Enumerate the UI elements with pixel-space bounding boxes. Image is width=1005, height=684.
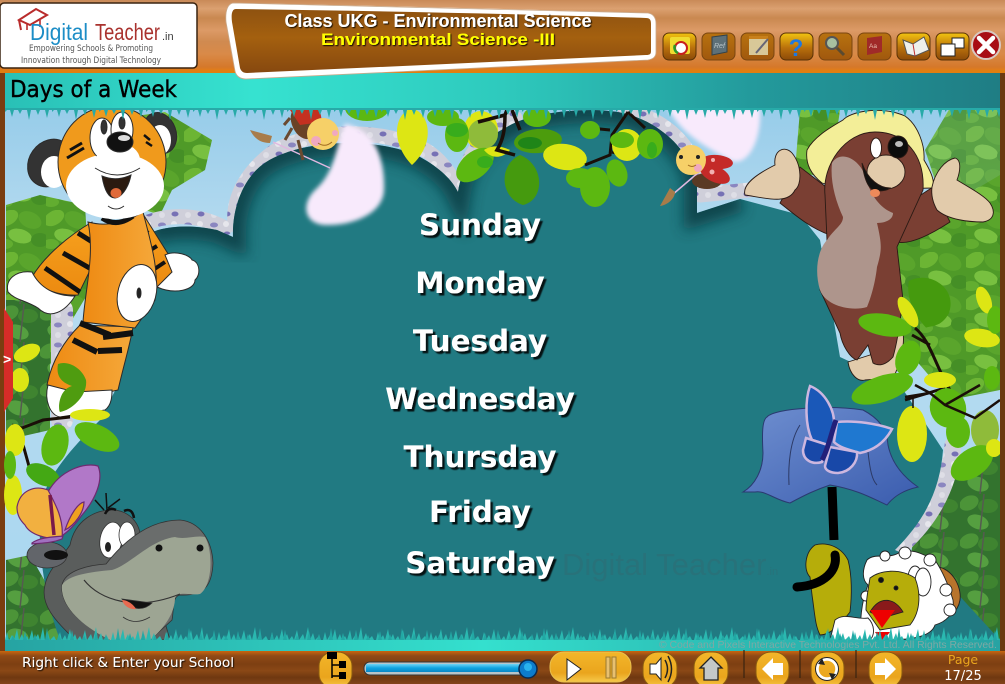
logo word: .in: .in [162,31,174,43]
icon: help: ? [789,35,803,62]
logo word: Digital: Digital [30,19,88,45]
plaque subheading: Environmental Science -III [321,30,555,49]
day: Wednesday: Wednesday [385,382,575,416]
icon: dictionary: Aa [869,43,877,50]
turtle character [797,544,960,642]
icon: refresh [811,652,844,684]
day: Tuesday: Tuesday [413,324,547,358]
progress bar [364,660,537,678]
title plaque [226,3,656,79]
icon: graduation cap [19,9,47,30]
teal centre panel [40,110,1000,640]
icon: dictionary [858,33,891,60]
hippo character [27,493,213,640]
logo tagline line 1: Empowering Schools & Promoting [29,44,153,54]
icon: magnifier [819,33,852,60]
foliage backdrop [6,108,1000,640]
left arm [780,167,830,235]
day: Friday: Friday [429,495,531,529]
bonnet [861,547,956,640]
page number: 17/25 [944,669,982,684]
mole character [745,110,993,380]
tiger character [7,106,199,417]
icon: folder clock [663,33,696,60]
left arm [32,222,100,295]
icon: tree menu [319,652,352,684]
icon: home [694,652,728,684]
page label: Page [948,652,978,667]
icon: notepad [741,33,774,60]
bottom band [5,626,1000,651]
list of days [385,208,575,580]
day: Saturday: Saturday [405,546,555,580]
play and pause control [550,652,631,682]
branch with leaves left [4,340,124,515]
watermark: Digital Teacher.in [562,547,778,582]
branch with leaves right [848,275,1003,488]
right arm [890,187,950,243]
icon: help [780,33,813,62]
right hand [932,158,993,222]
legs [47,325,133,400]
top title band [5,73,1000,122]
ladybug right [660,145,734,206]
top grass fringe [5,108,1000,122]
butterfly purple [17,465,100,544]
icon: reference book: Ref [714,43,726,50]
footer school label: Right click & Enter your School [22,655,234,671]
left and right frame: > [3,351,11,367]
icon: speaker [643,652,677,684]
top hanging leaves [345,95,663,207]
icon: reference book [702,33,735,60]
belly [817,157,893,309]
icon: open book [897,33,930,60]
glowing blobs [306,108,760,225]
face [66,153,164,219]
logo word: Teacher: Teacher [95,19,160,45]
icon: previous arrow [756,652,789,684]
logo panel [0,3,197,68]
plaque heading: Class UKG - Environmental Science [284,11,592,31]
divider [744,650,856,678]
page heading: Days of a Week [10,77,178,103]
icon: next arrow [869,652,902,684]
side tab [4,308,13,412]
right arm [142,214,178,288]
body [83,212,156,328]
brown body [820,132,923,365]
left hand [745,149,800,199]
copyright: © Code and Pixels Interactive Technologies Pvt. Ltd. All Rights Reserved. [659,640,997,651]
header wood background [0,0,1005,72]
day: Monday: Monday [415,266,545,300]
icon: close [972,31,1000,59]
day: Sunday: Sunday [419,208,541,242]
icon: window resize [936,33,969,60]
toolbar icons [663,31,1000,62]
footer bar [0,650,1005,684]
feet [848,333,903,380]
day: Thursday: Thursday [403,440,557,474]
umbrella [743,408,918,540]
ladybug left [250,103,339,168]
logo tagline line 2: Innovation through Digital Technology [21,56,161,66]
butterfly blue [803,386,892,473]
stone arch frame [62,110,953,545]
